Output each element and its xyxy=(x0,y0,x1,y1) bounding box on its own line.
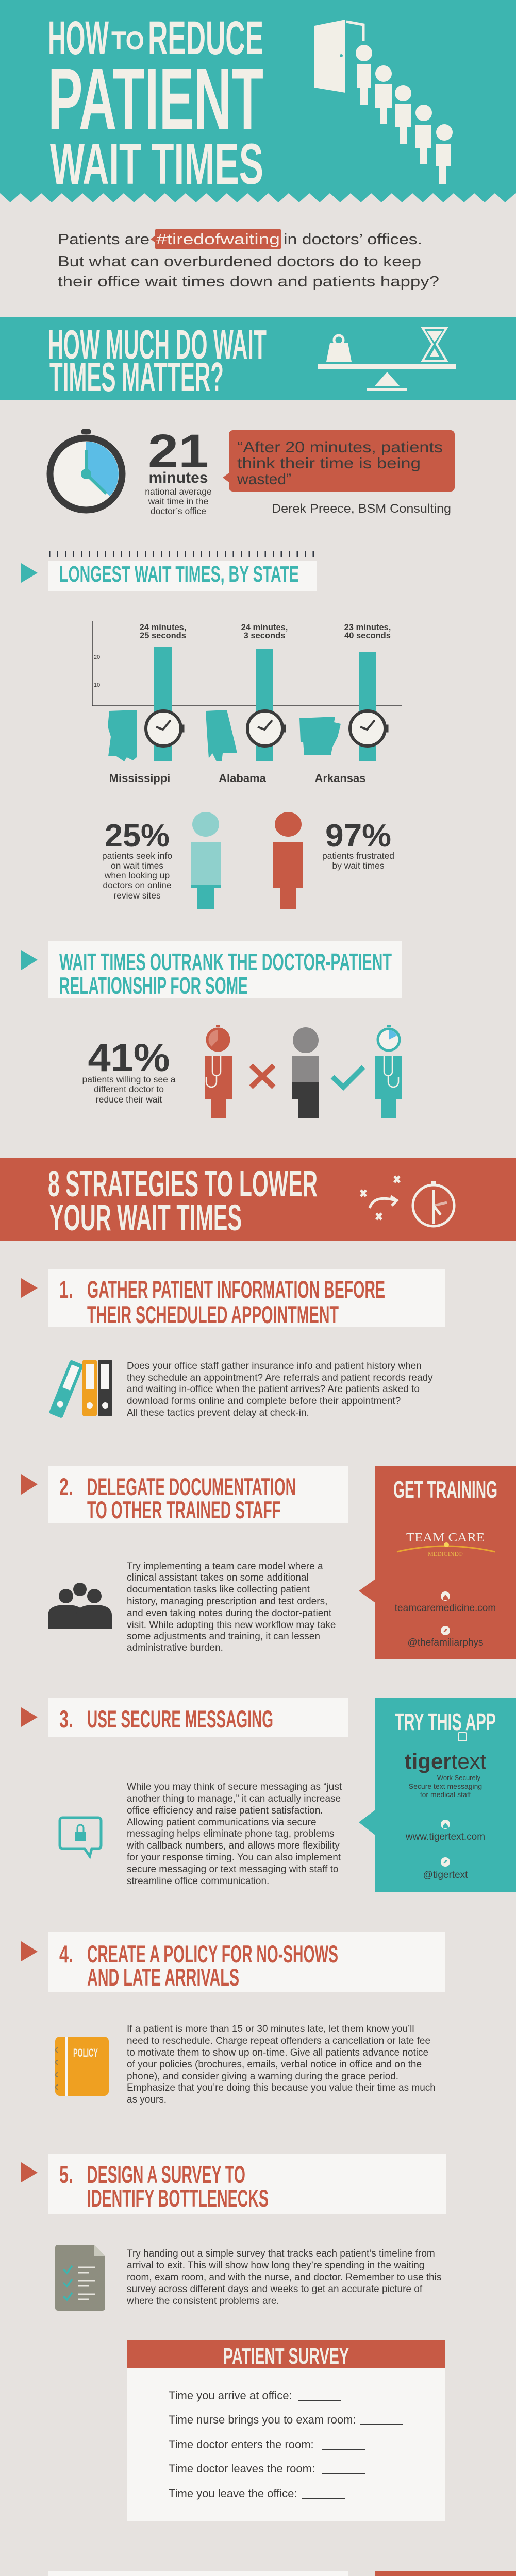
text: strategy 1 body: they schedule an appointment? Are referrals and patient records ready xyxy=(127,1372,433,1383)
intro text: Patients are xyxy=(58,231,149,248)
icon: play diagram and clock xyxy=(361,1176,454,1226)
stat: 97% frustrated: patients frustrated xyxy=(322,851,394,861)
section banner: how much do wait times matter xyxy=(0,317,516,400)
text: strategy 2 body: history, managing prescription and test orders, xyxy=(127,1596,327,1607)
stat: 25% seek info: patients seek info xyxy=(102,851,172,861)
bar chart: wait times by state: Mississippi xyxy=(109,772,170,785)
header banner xyxy=(0,0,516,202)
callout: quote: wasted” xyxy=(237,471,291,488)
stat: 21 minutes: national average xyxy=(145,486,212,497)
stat: 97% frustrated: 97% xyxy=(325,818,391,854)
icon: teal patient figure xyxy=(191,812,221,909)
stat: 97% frustrated xyxy=(322,818,394,871)
text: strategy 4 body: need to reschedule. Charge repeat offenders a cancellation or late fee xyxy=(127,2036,430,2046)
strategy 2 heading: DELEGATE DOCUMENTATION xyxy=(87,1473,296,1500)
text: strategy 3 body: another thing to manage,” it can actually increase xyxy=(127,1793,341,1804)
stat: 21 minutes: minutes xyxy=(148,469,208,486)
strategy 5 heading xyxy=(21,2154,446,2214)
bar chart: wait times by state: 10 xyxy=(94,682,100,688)
panel: patient survey form: Time doctor leaves the room: xyxy=(169,2462,315,2475)
title: PATIENT xyxy=(48,50,263,147)
text: strategy 2 body: documentation tasks like collecting patient xyxy=(127,1584,310,1595)
intro text: #tiredofwaiting xyxy=(156,231,280,248)
icon: survey document xyxy=(55,2245,105,2311)
strategy 1 heading xyxy=(21,1269,445,1328)
stat: 25% seek info: review sites xyxy=(113,890,161,901)
text: strategy 4 body: Emphasize that you’re doing this because you value their time as much xyxy=(127,2082,436,2093)
callout: quote: think their time is being xyxy=(237,455,421,472)
text: strategy 5 body xyxy=(126,2248,441,2307)
text: strategy 1 body: and waiting in-office when the patient arrives? Are patients asked to xyxy=(127,1384,420,1395)
text: strategy 1 body: Does your office staff gather insurance info and patient history when xyxy=(127,1361,422,1371)
text: strategy 4 body: phone), and consider giving a warning during the grace period. xyxy=(127,2071,398,2082)
text: strategy 3 body: While you may think of secure messaging as “just xyxy=(127,1782,342,1792)
icon: policy notebook xyxy=(55,2037,109,2096)
text: strategy 2 body: administrative burden. xyxy=(127,1642,223,1653)
section banner: 8 strategies: 8 STRATEGIES TO LOWER xyxy=(48,1164,318,1205)
stat: 25% seek info: 25% xyxy=(105,818,170,854)
strategy 2 heading: 2. xyxy=(59,1473,73,1500)
strategy 5 heading: 5. xyxy=(59,2161,73,2188)
text: strategy 3 body: streamline office communication. xyxy=(127,1876,269,1887)
icon: binders xyxy=(49,1360,112,1418)
strategy 3 heading: USE SECURE MESSAGING xyxy=(87,1705,273,1733)
heading: TIMES MATTER? xyxy=(49,354,224,400)
text: strategy 5 body: room, exam room, and with the nurse, and doctor. Remember to use this xyxy=(127,2272,441,2283)
panel: try this app tigertext: @tigertext xyxy=(423,1870,468,1880)
title: TO xyxy=(111,26,144,55)
icon: teal doctor with stopwatch head xyxy=(375,1025,402,1118)
text: strategy 1 body: download forms online and complete before their appointment? xyxy=(127,1396,401,1406)
panel: patient survey form xyxy=(127,2340,445,2521)
panel: patient survey form: Time you arrive at office: xyxy=(169,2389,292,2402)
stat: 21 minutes xyxy=(145,425,212,516)
bar chart: wait times by state xyxy=(92,621,402,785)
callout: quote: Derek Preece, BSM Consulting xyxy=(272,502,451,516)
stat: 25% seek info: on wait times xyxy=(111,860,163,871)
icon: door and queue of patients xyxy=(314,20,453,184)
icon: red doctor with stopwatch head xyxy=(205,1025,232,1118)
strategy 4 heading: AND LATE ARRIVALS xyxy=(87,1963,239,1991)
logo: tigertext: for medical staff xyxy=(420,1790,471,1799)
panel: patient survey form: Time you leave the office: xyxy=(169,2487,297,2500)
stat: 21 minutes: wait time in the xyxy=(148,496,208,506)
text: strategy 3 body: with callback numbers, and allows more flexibility xyxy=(126,1840,340,1851)
logo: team care medicine: TEAM CARE xyxy=(406,1531,485,1545)
panel: patient survey form: Time doctor enters the room: xyxy=(169,2438,314,2451)
logo: tigertext: Secure text messaging xyxy=(409,1782,482,1790)
text: strategy 3 body: messaging helps eliminate phone tag, problems xyxy=(127,1828,334,1839)
text: strategy 3 body: office efficiency and raise patient satisfaction. xyxy=(127,1805,323,1816)
intro text: But what can overburdened doctors do to keep xyxy=(58,253,421,270)
text: strategy 1 body xyxy=(127,1361,433,1418)
heading: longest wait times by state xyxy=(21,554,317,591)
title: REDUCE xyxy=(148,12,263,64)
bar chart: wait times by state: 23 minutes, xyxy=(344,623,391,632)
stat: 41% xyxy=(82,1036,176,1105)
intro text: their office wait times down and patients happy? xyxy=(58,274,439,290)
heading: wait times outrank xyxy=(21,941,402,999)
strategy 1 heading: 1. xyxy=(59,1276,73,1303)
text: strategy 3 body: Allowing patient communications via secure xyxy=(127,1817,317,1828)
section banner: 8 strategies xyxy=(0,1158,516,1241)
intro text: in doctors’ offices. xyxy=(284,231,422,248)
stat: 41%: different doctor to xyxy=(94,1084,164,1094)
logo: tigertext: Work Securely xyxy=(437,1774,481,1782)
logo: tigertext xyxy=(405,1733,487,1799)
text: strategy 4 body: If a patient is more than 15 or 30 minutes late, let them know you’ll xyxy=(127,2024,414,2035)
strategy 4 heading: 4. xyxy=(59,1940,73,1968)
icon: scale with weight and hourglass xyxy=(318,328,456,391)
logo: team care medicine xyxy=(397,1531,495,1557)
text: strategy 5 body: where the consistent problems are. xyxy=(126,2296,279,2307)
stat: 41%: patients willing to see a xyxy=(82,1074,176,1084)
text: strategy 3 body: secure messaging or text messaging with staff to xyxy=(127,1864,338,1875)
logo: team care medicine: MEDICINE® xyxy=(428,1550,463,1557)
text: strategy 3 body: for your response timing. You can also implement xyxy=(127,1852,341,1863)
stat: 25% seek info: doctors on online xyxy=(103,880,172,890)
icon: policy notebook: POLICY xyxy=(73,2046,98,2059)
heading: wait times outrank: RELATIONSHIP FOR SOME xyxy=(59,972,248,999)
logo: tigertext: tigertext xyxy=(405,1749,487,1773)
stat: 41%: reduce their wait xyxy=(96,1094,162,1105)
strategy 5 heading: DESIGN A SURVEY TO xyxy=(87,2161,245,2188)
strategy 5 heading: IDENTIFY BOTTLENECKS xyxy=(87,2184,269,2212)
text: strategy 4 body: to motivate them to show up on-time. Give all patients advance notice xyxy=(127,2047,428,2058)
section banner: 8 strategies: YOUR WAIT TIMES xyxy=(49,1198,242,1239)
text: strategy 2 body: some adjustments and training, it can lessen xyxy=(127,1631,320,1642)
bar chart: wait times by state: 24 minutes, xyxy=(140,623,186,632)
intro text xyxy=(58,229,439,290)
panel: try this app tigertext xyxy=(359,1698,516,1892)
text: strategy 2 body: visit. While adopting this new workflow may take xyxy=(127,1620,336,1631)
icon: stopwatch xyxy=(50,429,122,510)
text: strategy 4 body: of your policies (brochures, emails, verbal notice in office and on the xyxy=(127,2059,422,2070)
panel: patient survey form: Time nurse brings you to exam room: xyxy=(169,2413,356,2426)
heading: HOW MUCH DO WAIT xyxy=(48,321,267,367)
text: strategy 2 body xyxy=(127,1561,336,1653)
title xyxy=(48,12,263,196)
stat: 21 minutes: doctor’s office xyxy=(151,506,206,516)
text: strategy 5 body: survey across different days and weeks to get an accurate picture of xyxy=(127,2284,423,2295)
panel: get training: @thefamiliarphys xyxy=(407,1637,484,1648)
bar chart: wait times by state: 3 seconds xyxy=(244,631,285,640)
bar chart: wait times by state: 20 xyxy=(94,654,100,660)
strategy 6 heading xyxy=(21,2571,348,2576)
icon: watches xyxy=(146,711,388,746)
icon: red x xyxy=(251,1065,274,1087)
icon: people group xyxy=(48,1583,112,1629)
text: strategy 4 body: as yours. xyxy=(127,2094,167,2105)
strategy 1 heading: THEIR SCHEDULED APPOINTMENT xyxy=(87,1301,339,1328)
panel: try this app qless xyxy=(359,2571,516,2576)
text: strategy 2 body: Try implementing a team care model where a xyxy=(127,1561,323,1572)
strategy 4 heading: CREATE A POLICY FOR NO-SHOWS xyxy=(87,1940,338,1968)
bar chart: wait times by state: 24 minutes, xyxy=(241,623,288,632)
text: strategy 5 body: Try handing out a simple survey that tracks each patient’s timeline from xyxy=(127,2248,435,2259)
stat: 97% frustrated: by wait times xyxy=(332,860,385,871)
strategy 4 heading xyxy=(21,1932,445,1992)
panel: patient survey form: PATIENT SURVEY xyxy=(223,2344,349,2369)
stat: 25% seek info xyxy=(102,818,172,901)
icon: state shapes xyxy=(108,710,341,761)
title: WAIT TIMES xyxy=(50,132,263,196)
icon: red patient figure xyxy=(273,812,303,909)
stat: 21 minutes: 21 xyxy=(148,425,209,478)
strategy 3 heading: 3. xyxy=(59,1705,73,1733)
text: strategy 4 body xyxy=(127,2024,436,2105)
panel: get training xyxy=(359,1466,516,1659)
callout: quote: “After 20 minutes, patients xyxy=(237,439,443,456)
panel: try this app tigertext: www.tigertext.com xyxy=(405,1832,485,1842)
title: HOW xyxy=(48,12,109,64)
heading xyxy=(48,321,267,400)
text: strategy 2 body: and even taking notes during the doctor-patient xyxy=(127,1608,332,1619)
text: strategy 3 body xyxy=(126,1782,342,1887)
text: strategy 5 body: arrival to exit. This will show how long they’re spending in the waiting xyxy=(127,2260,424,2271)
strategy 2 heading xyxy=(21,1466,348,1523)
bar chart: wait times by state: Alabama xyxy=(219,772,267,785)
bar chart: wait times by state: 25 seconds xyxy=(140,631,186,640)
icon: secure chat bubble xyxy=(60,1818,101,1856)
strategy 3 heading xyxy=(21,1698,348,1737)
text: strategy 2 body: clinical assistant takes on some additional xyxy=(127,1572,309,1583)
callout: quote xyxy=(223,430,455,516)
panel: get training: teamcaremedicine.com xyxy=(395,1603,496,1614)
heading: longest wait times by state: LONGEST WAIT TIMES, BY STATE xyxy=(59,562,299,587)
stat: 41%: 41% xyxy=(88,1036,170,1080)
strategy 2 heading: TO OTHER TRAINED STAFF xyxy=(87,1496,281,1523)
icon: gray patient xyxy=(292,1027,319,1118)
bar chart: wait times by state: 40 seconds xyxy=(344,631,391,640)
text: strategy 1 body: All these tactics prevent delay at check-in. xyxy=(127,1408,309,1418)
bar chart: wait times by state: Arkansas xyxy=(314,772,366,785)
stat: 25% seek info: when looking up xyxy=(104,870,170,880)
icon: teal check xyxy=(332,1067,363,1087)
